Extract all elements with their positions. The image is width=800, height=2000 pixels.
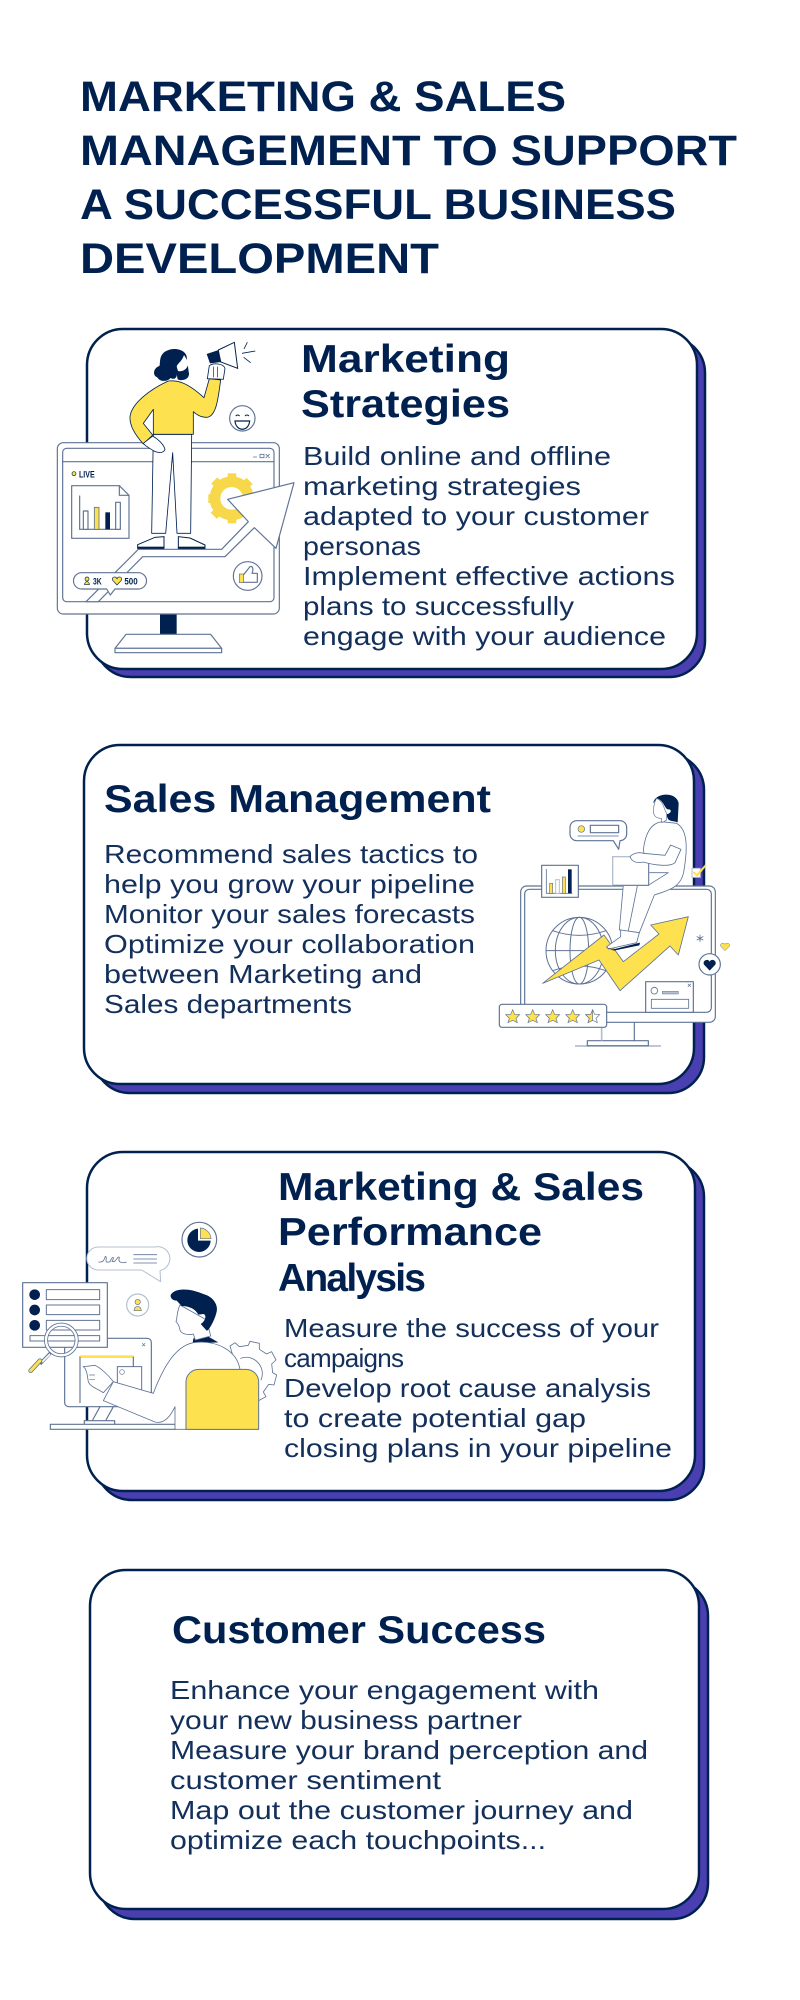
callout: followers and likes: 500: [124, 576, 138, 586]
card: [87, 1152, 695, 1491]
text block: marketing strategies: [303, 471, 581, 501]
text block: campaigns: [284, 1343, 404, 1373]
title: DEVELOPMENT: [80, 235, 439, 283]
card shadow: [95, 337, 705, 677]
megaphone: [218, 342, 238, 368]
pants: [152, 434, 192, 533]
icon: globe: [546, 917, 613, 984]
title: MANAGEMENT TO SUPPORT: [80, 127, 737, 175]
text block: your new business partner: [170, 1705, 522, 1735]
card shadow: [96, 1161, 704, 1500]
card: [84, 745, 694, 1084]
icon: thumbs up: [233, 562, 262, 590]
icon: checkbox: [692, 865, 706, 877]
illustration: woman with megaphone on monitor: [57, 342, 294, 653]
heading: marketing and sales performance analysis: Analysis: [278, 1257, 426, 1300]
icon: gear: [230, 1341, 277, 1401]
shoes: [138, 537, 205, 548]
text block: Monitor your sales forecasts: [104, 899, 475, 929]
panel: customer success: [90, 1570, 708, 1919]
text block: plans to successfully: [303, 591, 574, 621]
text block: engage with your audience: [303, 621, 666, 651]
icon: live badge: [72, 469, 95, 479]
icon: live badge: LIVE: [79, 469, 95, 479]
card: [87, 329, 697, 669]
icon: pie chart: [182, 1222, 217, 1257]
arrow: rising yellow: [543, 917, 688, 991]
face: [177, 355, 189, 371]
icon: computer screen: [50, 1338, 175, 1429]
text block: [303, 441, 675, 651]
text block: Sales departments: [104, 989, 352, 1019]
panel: performance analysis: [23, 1152, 704, 1500]
hand on hip: [143, 436, 165, 452]
icon: bar chart: [542, 865, 578, 897]
title: [80, 73, 737, 283]
heading: marketing strategies: [301, 338, 510, 426]
text block: help you grow your pipeline: [104, 869, 475, 899]
icon: checklist: [23, 1283, 107, 1347]
figure: woman with megaphone: [130, 342, 255, 549]
text block: Implement effective actions: [303, 561, 675, 591]
figure: man in chair: [83, 1289, 259, 1429]
icon: chat bubble: [87, 1247, 170, 1282]
heading: sales management: Sales Management: [104, 778, 491, 821]
text block: [104, 839, 478, 1019]
card shadow: [94, 754, 704, 1093]
icon: bar chart document: [72, 486, 129, 538]
text block: [170, 1675, 648, 1855]
text block: Optimize your collaboration: [104, 929, 475, 959]
text block: Develop root cause analysis: [284, 1373, 651, 1403]
text block: personas: [303, 531, 421, 561]
title: A SUCCESSFUL BUSINESS: [80, 181, 676, 229]
illustration: analyst at desk: [23, 1222, 277, 1429]
text block: Map out the customer journey and: [170, 1795, 633, 1825]
card shadow: [99, 1580, 708, 1919]
text block: adapted to your customer: [303, 501, 649, 531]
arrow: rising trend: [86, 483, 294, 602]
panel: sales management: [84, 745, 730, 1093]
icon: smiley: [230, 406, 255, 431]
figure: seated woman with laptop: [606, 795, 686, 951]
illustration: woman on monitor with rising arrow: [499, 795, 730, 1046]
heading: marketing strategies: Marketing: [301, 338, 510, 381]
title: MARKETING & SALES: [80, 73, 566, 121]
icon: speech bubble: [570, 821, 627, 849]
callout: followers and likes: [73, 573, 146, 595]
icon: magnifying glass: [31, 1325, 77, 1371]
text block: Build online and offline: [303, 441, 611, 471]
icon: five star rating: [499, 1004, 607, 1027]
text block: between Marketing and: [104, 959, 422, 989]
icon: monitor: [521, 886, 715, 1046]
text block: Measure your brand perception and: [170, 1735, 648, 1765]
icon: user badge: [127, 1294, 149, 1316]
icon: small window: [646, 982, 693, 1012]
text block: Enhance your engagement with: [170, 1675, 599, 1705]
text block: Measure the success of your: [284, 1313, 659, 1343]
text block: to create potential gap: [284, 1403, 586, 1433]
heading: marketing and sales performance analysis: [278, 1166, 644, 1300]
text block: [284, 1313, 672, 1463]
panel: marketing strategies: [57, 329, 705, 677]
heading: marketing and sales performance analysis: Marketing & Sales: [278, 1166, 644, 1209]
sweater: [130, 379, 221, 444]
hair: [154, 349, 189, 381]
heading: customer success: Customer Success: [172, 1609, 546, 1652]
callout: followers and likes: 3K: [93, 576, 102, 586]
heading: marketing and sales performance analysis: Performance: [278, 1211, 542, 1254]
text block: optimize each touchpoints...: [170, 1825, 546, 1855]
icon: heart: [697, 935, 730, 975]
text block: closing plans in your pipeline: [284, 1433, 672, 1463]
card: [90, 1570, 699, 1909]
icon: gear: [208, 473, 255, 523]
icon: monitor: [57, 443, 279, 653]
text block: customer sentiment: [170, 1765, 442, 1795]
heading: marketing strategies: Strategies: [301, 383, 510, 426]
text block: Recommend sales tactics to: [104, 839, 478, 869]
